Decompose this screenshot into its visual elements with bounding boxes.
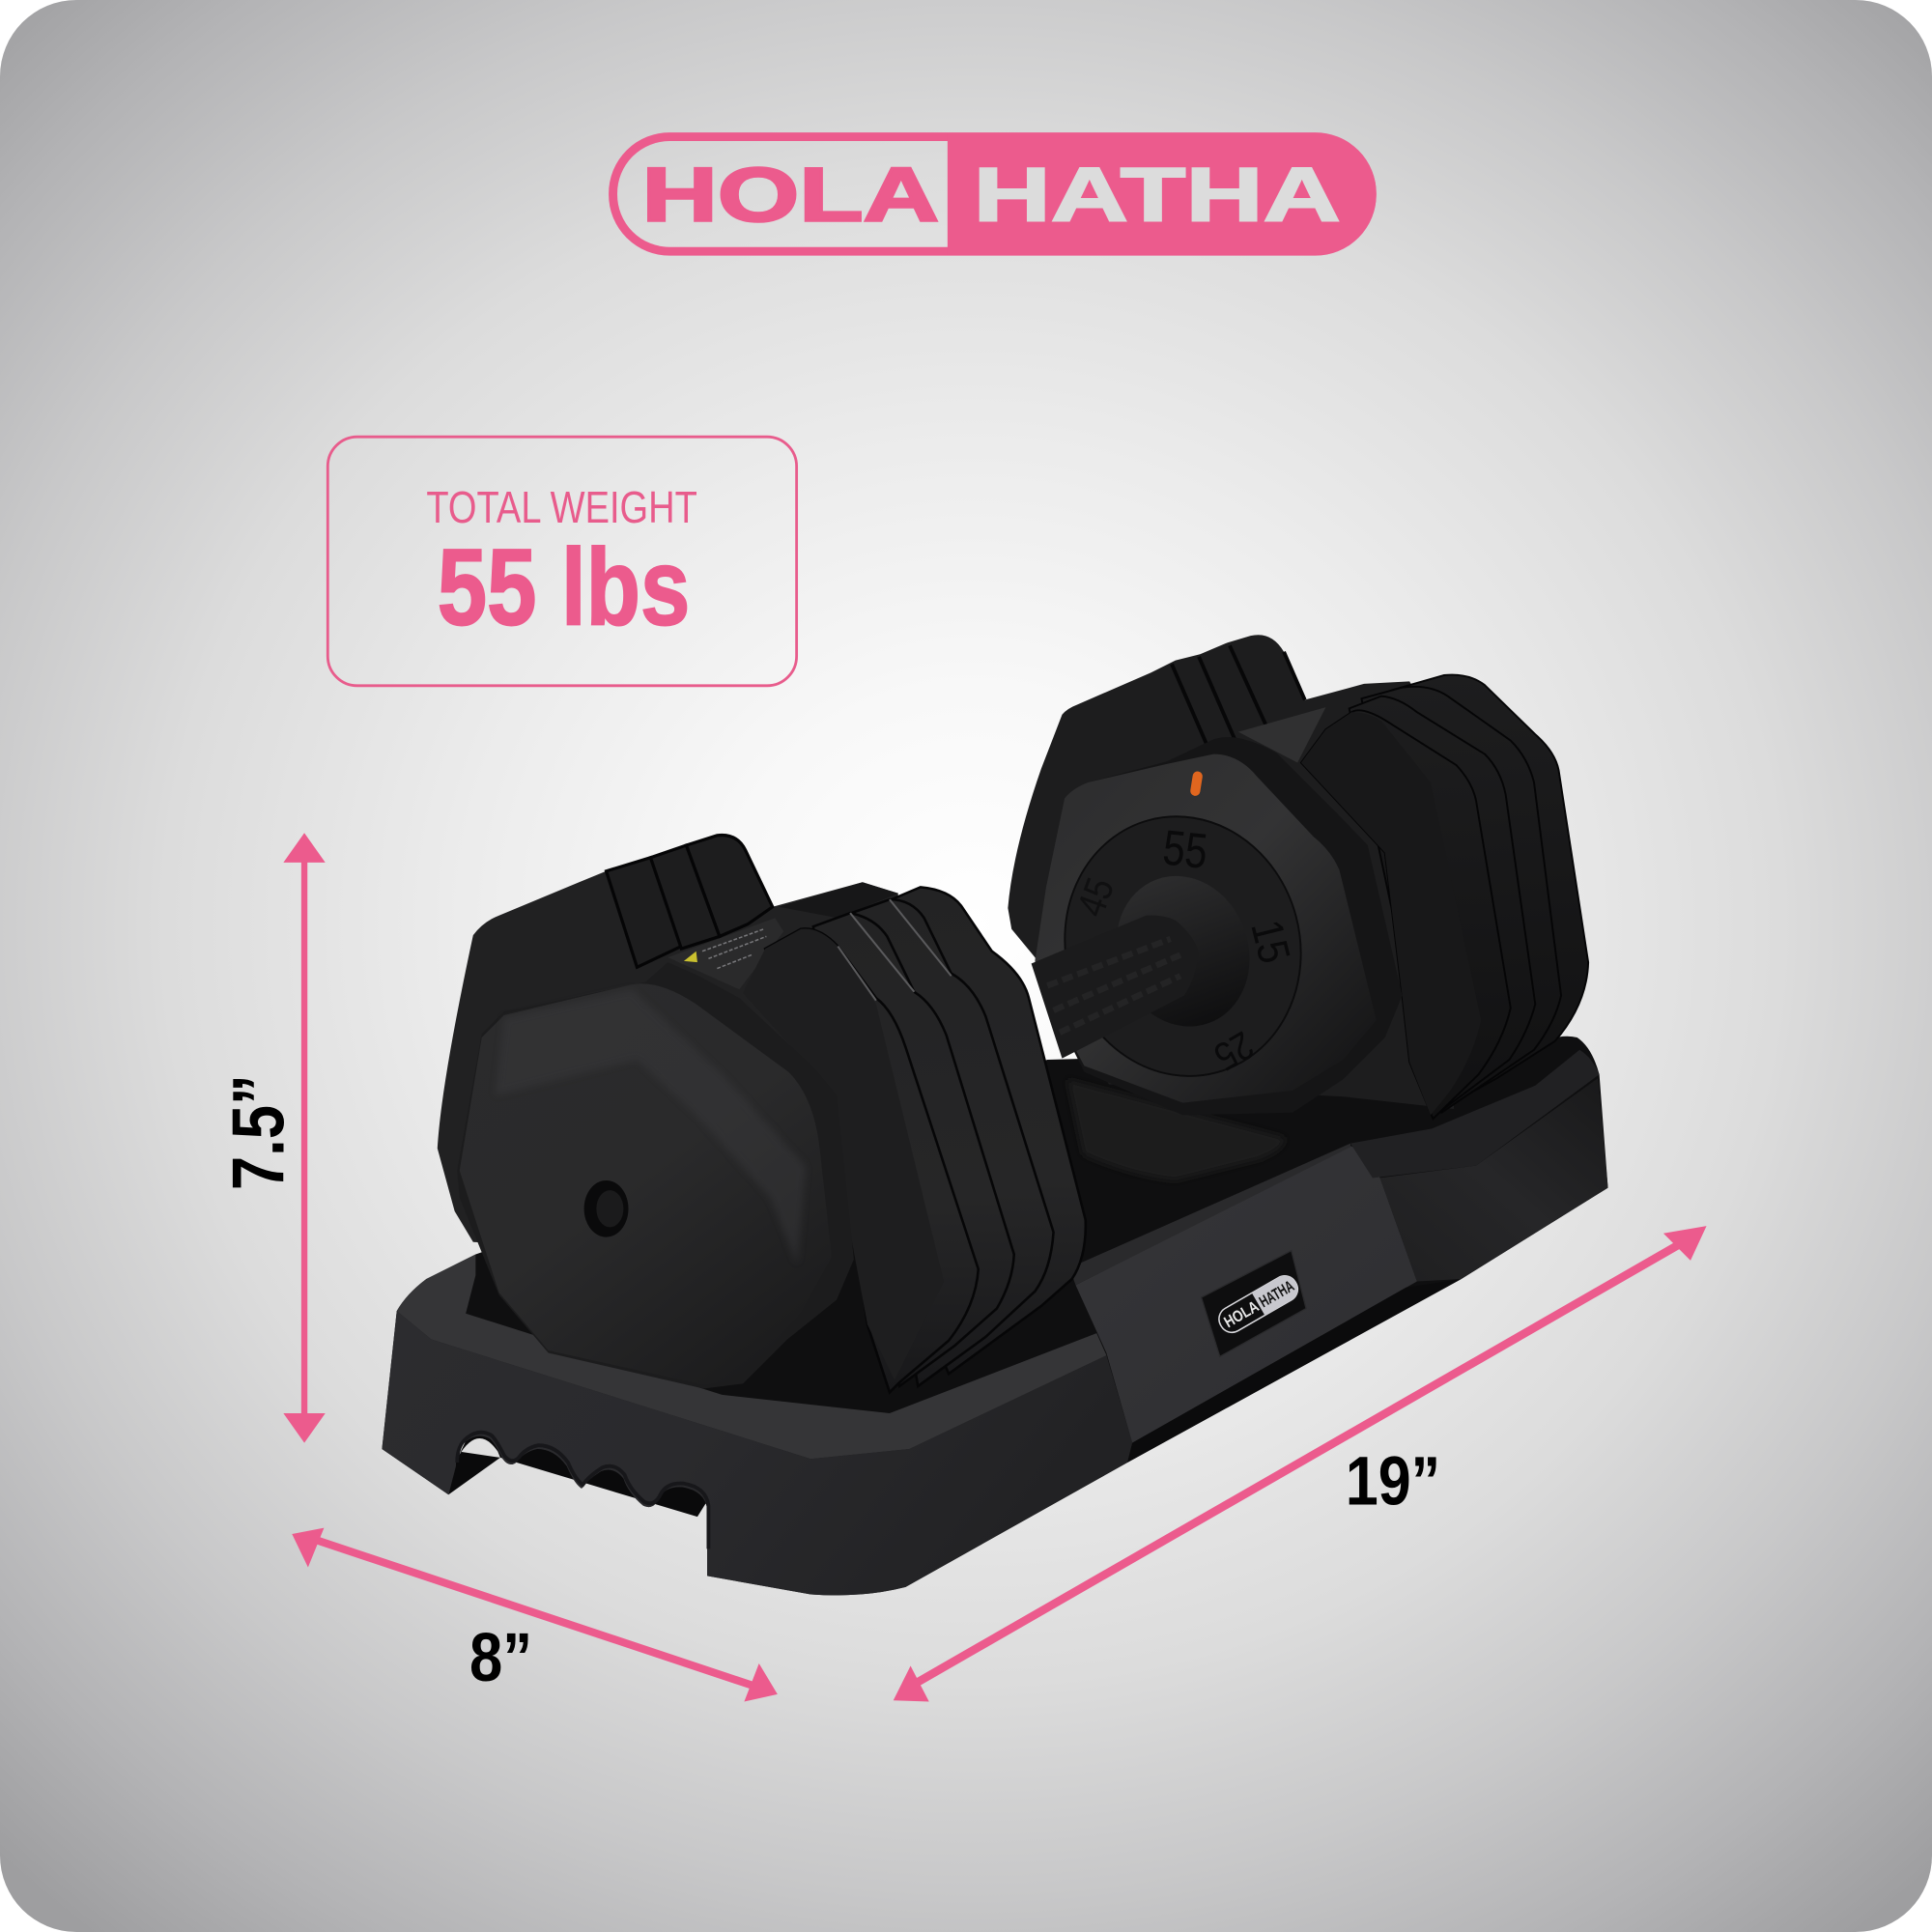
height arrow: [283, 833, 326, 1443]
far weight: [1008, 635, 1588, 1119]
near plate 1 inner panel: [743, 928, 944, 1380]
width arrow: [292, 1528, 778, 1701]
tray handle lip: [457, 1433, 708, 1548]
handle: [1032, 915, 1199, 1059]
tray right rim: [1350, 1050, 1600, 1178]
callout label: TOTAL WEIGHT: [426, 482, 697, 532]
logo filled right half: [948, 133, 1377, 255]
tray handle underside: [448, 1423, 710, 1517]
near rear plates: [607, 835, 773, 967]
tray connector left: [1069, 1144, 1350, 1285]
tray badge: HOLA: [1221, 1297, 1262, 1331]
length arrow: [894, 1226, 1707, 1701]
near plate 3: [838, 899, 1054, 1386]
logo: HolaHatha: [613, 133, 1377, 255]
tray body: [382, 1037, 1608, 1595]
far weight top strip: [1238, 707, 1325, 763]
dial number 55: 55: [1160, 819, 1210, 879]
near face plate: [460, 983, 832, 1385]
logo word HATHA: HATHA: [974, 151, 1341, 237]
near weight: [438, 835, 1086, 1392]
far plate 3: [1361, 687, 1561, 1113]
dimension: height 7.5: [217, 833, 326, 1443]
dial number 15: 15: [1241, 915, 1300, 968]
callout value: 55 lbs: [438, 526, 690, 648]
near plate 4: [863, 887, 1086, 1374]
tray rim: [397, 1254, 1106, 1459]
far plate 1: [1301, 710, 1511, 1119]
near weight rear block: [438, 835, 898, 1244]
orange indicator: [1189, 771, 1204, 797]
tray front wall: [382, 1311, 1132, 1595]
tray badge: [1202, 1251, 1306, 1356]
tray right end wall: [1380, 1078, 1608, 1282]
tray badge: HATHA: [1256, 1277, 1297, 1311]
near plate 2: [813, 913, 1014, 1386]
near face rim: [457, 962, 854, 1389]
near top strip: [779, 882, 898, 918]
dial number 25: 25: [1207, 1023, 1261, 1080]
near face chamfer highlight: [496, 989, 806, 1264]
near face bolt: [584, 1180, 629, 1237]
dial hub: [1095, 857, 1270, 1045]
length label: 19”: [1346, 1442, 1440, 1520]
height label: 7.5”: [217, 1074, 299, 1190]
far plate panel: [1301, 712, 1481, 1115]
tray bridge panel: [1076, 1146, 1417, 1443]
logo word HOLA: HOLA: [642, 151, 939, 237]
far weight dial plate rim: [1035, 737, 1403, 1115]
logo pill outline: [613, 137, 1372, 251]
width label: 8”: [469, 1619, 532, 1696]
dumbbell product on tray: [382, 635, 1608, 1595]
far weight rear grooves: [1172, 645, 1305, 750]
tray well: [1067, 1079, 1285, 1180]
callout: total weight: [327, 437, 797, 686]
dimension: width 8: [292, 1528, 778, 1701]
far plate 2: [1350, 696, 1535, 1115]
dimension: length 19: [894, 1226, 1707, 1701]
far weight dial plate face: [1035, 754, 1377, 1103]
dial ring: [1036, 790, 1330, 1103]
near warning label: [668, 918, 783, 989]
callout border: [327, 437, 797, 686]
near plate highlights: [838, 899, 952, 1001]
tray recess: [1127, 1279, 1462, 1463]
dial number 45: 45: [1068, 872, 1122, 922]
near plate 1: [765, 928, 979, 1392]
far weight rear block: [1008, 635, 1454, 1109]
far plate 4: [1392, 675, 1588, 1109]
tray: [382, 1037, 1608, 1595]
